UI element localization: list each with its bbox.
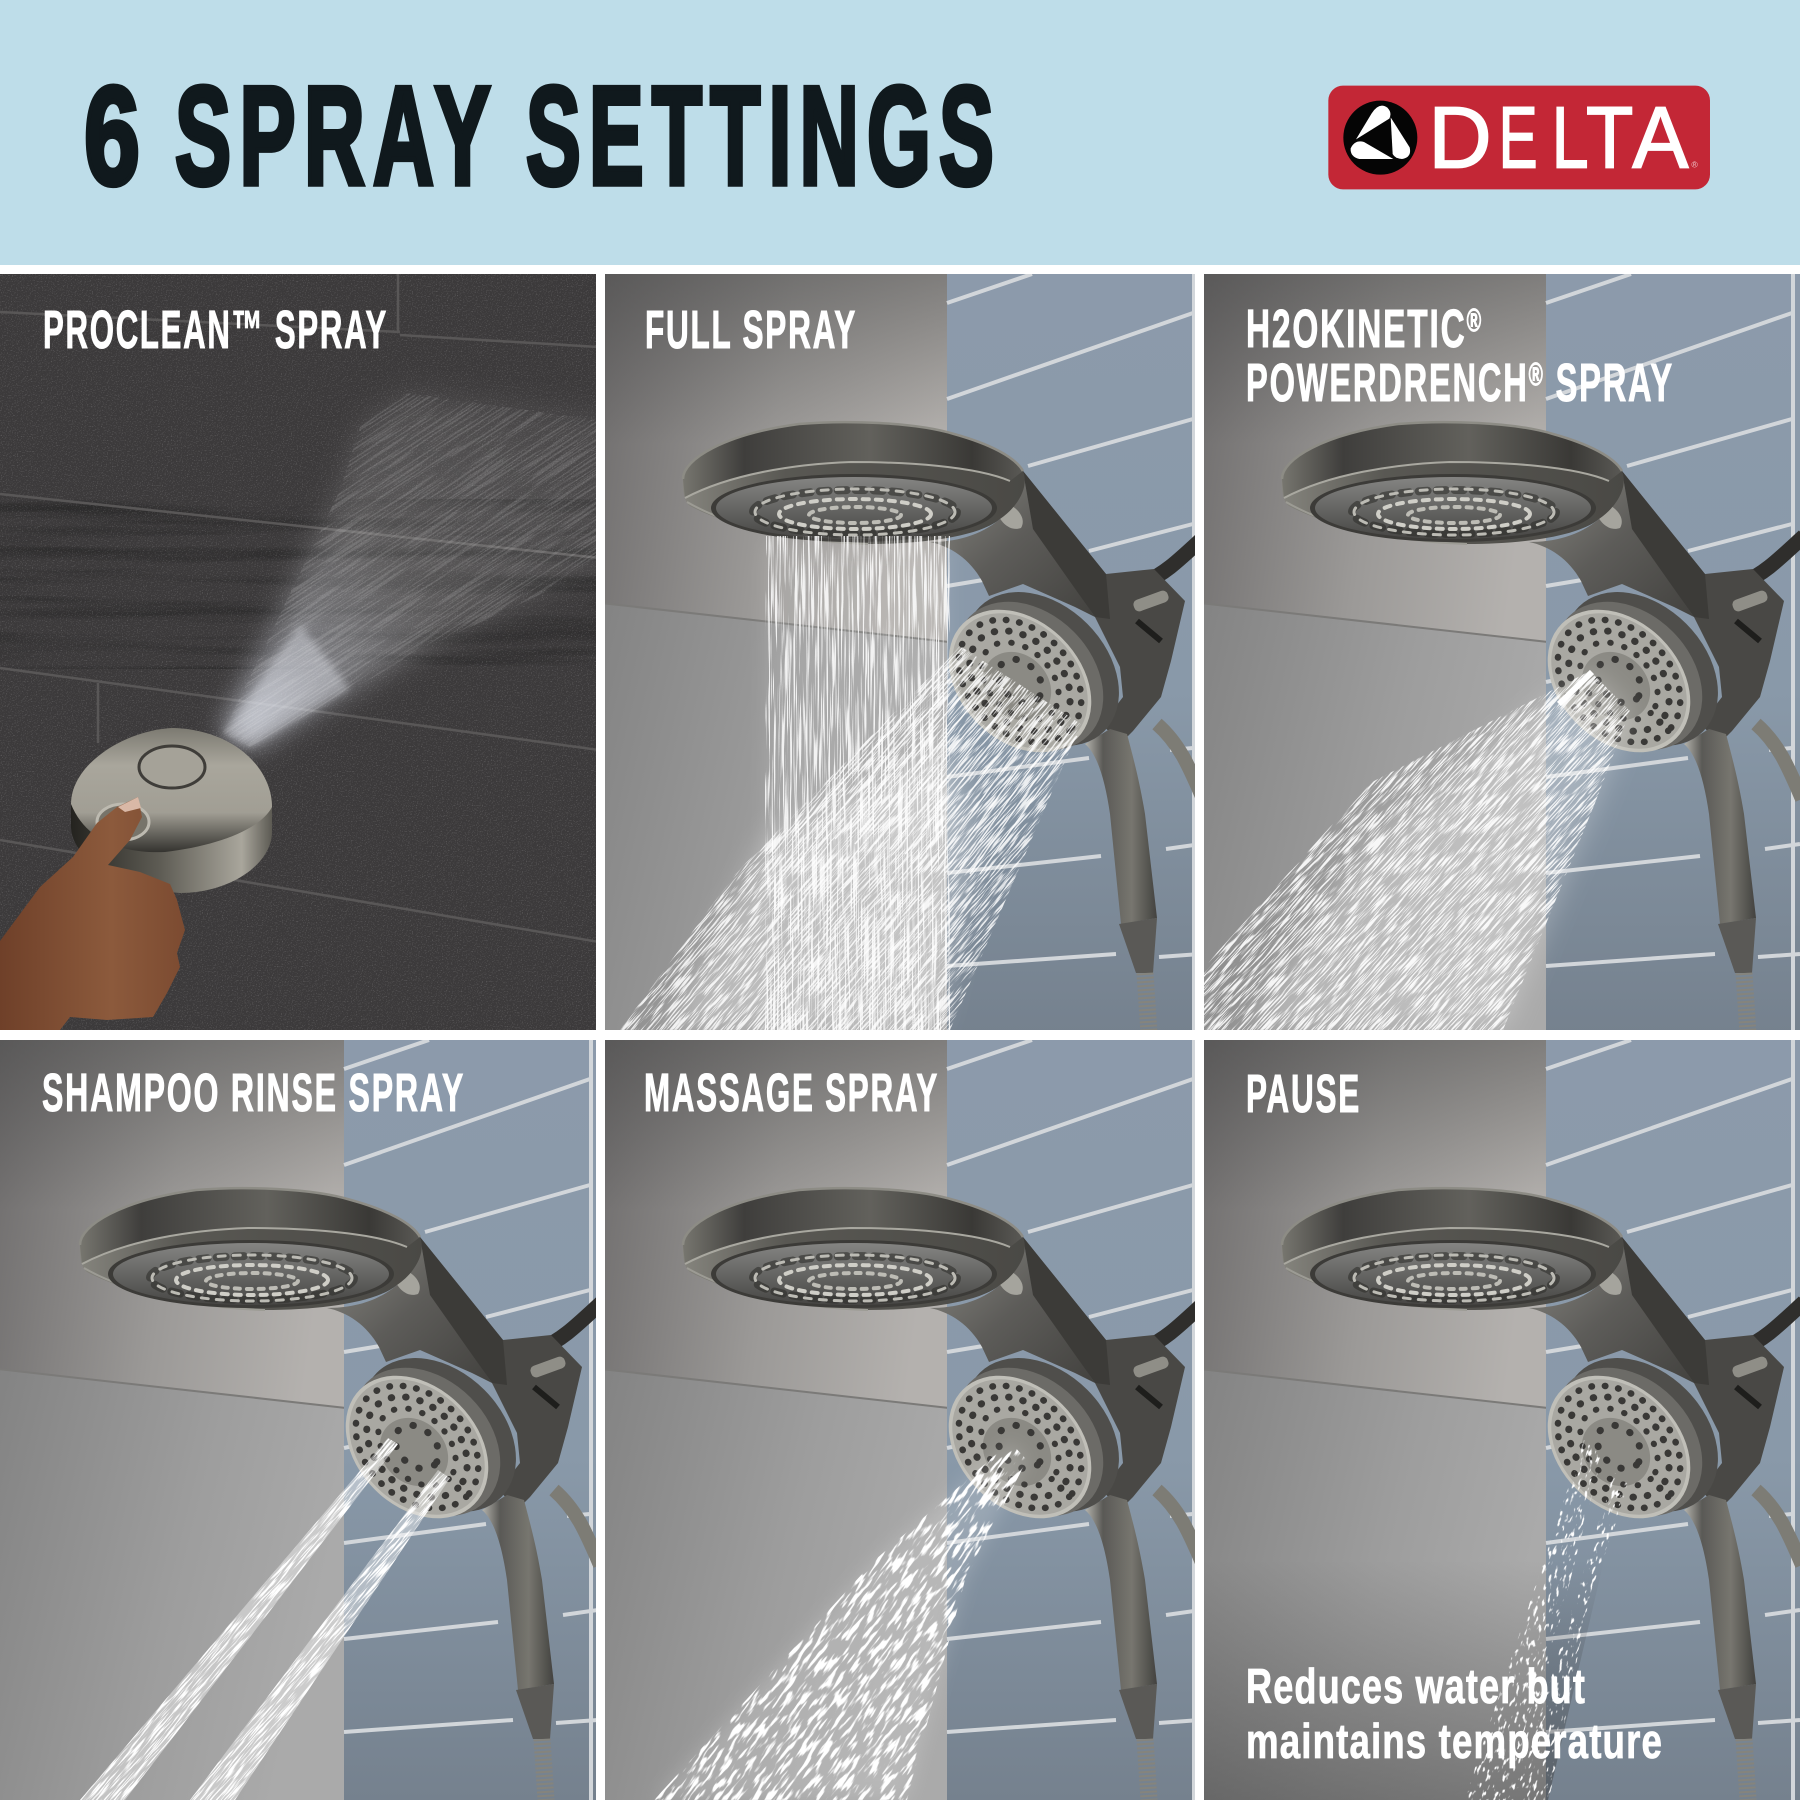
title: SETTINGS bbox=[526, 57, 1002, 214]
water jet bbox=[1204, 666, 1638, 1030]
label: H2OKinetic PowerDrench: POWERDRENCH bbox=[1246, 353, 1714, 413]
Delta logo: E bbox=[1499, 88, 1538, 186]
title: 6 bbox=[84, 57, 150, 214]
spray fan bbox=[209, 393, 596, 762]
Delta logo: T bbox=[1586, 88, 1633, 186]
panel: massage spray bbox=[605, 1040, 1195, 1800]
label: ProClean: PROCLEAN™ SPRAY bbox=[43, 300, 388, 360]
Delta logo: A bbox=[1632, 88, 1689, 186]
label: full spray: FULL SPRAY bbox=[645, 300, 857, 360]
Delta logo: D bbox=[1428, 88, 1492, 186]
label: massage: MASSAGE SPRAY bbox=[644, 1063, 939, 1123]
label: H2OKinetic PowerDrench: ® bbox=[1467, 302, 1483, 338]
header band bbox=[0, 0, 1800, 265]
panel: full spray bbox=[605, 274, 1195, 1030]
label: H2OKinetic PowerDrench: SPRAY bbox=[1545, 353, 1674, 413]
water pulses bbox=[654, 1444, 1026, 1800]
caption: pause description bbox=[1246, 1660, 1663, 1769]
panel: ProClean spray bbox=[0, 274, 596, 1030]
hand shower puck bbox=[71, 728, 272, 893]
label: pause: PAUSE bbox=[1246, 1064, 1361, 1124]
Delta logo: L bbox=[1552, 88, 1589, 186]
water droplets bbox=[1468, 1440, 1628, 1800]
title bbox=[84, 57, 1002, 214]
panel: H2OKinetic PowerDrench spray bbox=[1204, 274, 1800, 1030]
label: H2OKinetic PowerDrench: ® bbox=[1529, 356, 1545, 392]
label: H2OKinetic PowerDrench bbox=[1246, 299, 1674, 413]
panel: shampoo rinse spray bbox=[0, 1040, 596, 1800]
two water jets bbox=[80, 1438, 450, 1800]
Delta logo: ® bbox=[1691, 159, 1698, 169]
hand bbox=[0, 797, 185, 1030]
title: SPRAY bbox=[175, 57, 499, 214]
panel: pause bbox=[1204, 1040, 1800, 1800]
Delta logo bbox=[1328, 86, 1710, 189]
label: H2OKinetic PowerDrench: H2OKINETIC bbox=[1246, 299, 1603, 359]
caption: pause description: Reduces water but bbox=[1246, 1660, 1586, 1714]
caption: pause description: maintains temperature bbox=[1246, 1715, 1663, 1769]
water: rain from large head and fan from hand shower bbox=[620, 536, 1081, 1030]
